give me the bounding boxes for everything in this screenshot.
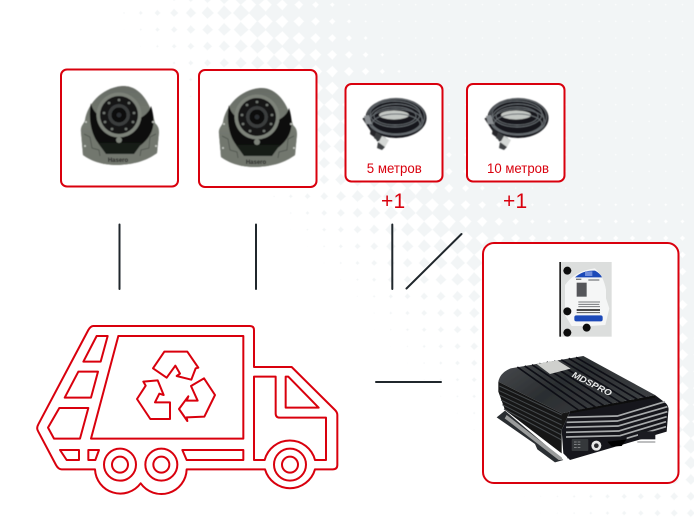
quantity: plus one for 5 m cable: +1 <box>381 190 405 213</box>
panel: 10 metre cable <box>467 84 564 182</box>
panel: storage and recorder <box>483 243 678 483</box>
panel: camera 2 <box>199 70 316 187</box>
connection lines <box>120 224 462 382</box>
panel: camera 1 <box>61 70 178 186</box>
quantity: plus one for 10 m cable: +1 <box>503 190 527 213</box>
icon: mobile video recorder <box>497 356 669 462</box>
panel: 5 metre cable <box>346 84 442 182</box>
icon: mobile video recorder: MDSPRO <box>570 370 614 398</box>
icon: dome camera 2 <box>219 88 297 167</box>
icon: garbage truck <box>37 326 337 494</box>
label: 5 metres: 5 метров <box>367 161 422 176</box>
icon: hard disk drive <box>559 262 612 337</box>
icon: dome camera 1 <box>81 86 159 165</box>
icon: recycling arrows <box>137 352 215 421</box>
label: 10 metres: 10 метров <box>487 161 549 176</box>
icon: cable coil 10 m <box>486 98 548 150</box>
icon: cable coil 5 m <box>364 98 426 150</box>
